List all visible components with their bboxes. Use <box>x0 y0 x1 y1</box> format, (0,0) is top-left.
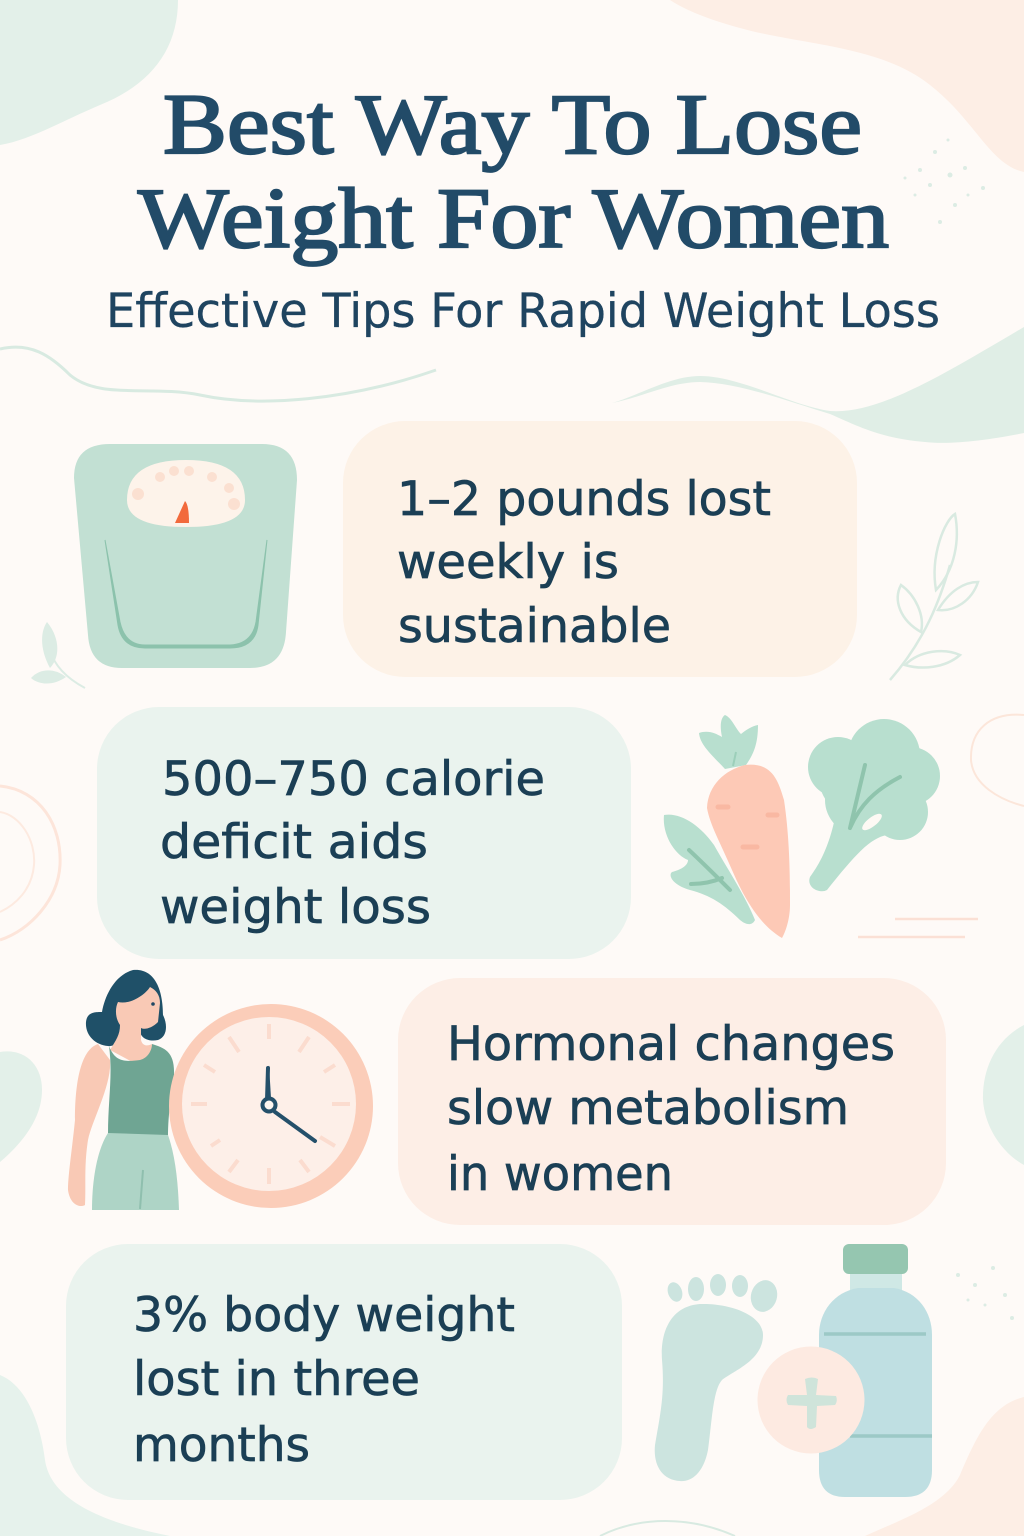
panel: sustainable rate <box>343 421 857 677</box>
title <box>138 76 889 266</box>
panel: sustainable rate: sustainable <box>398 599 671 654</box>
icon: footprint <box>655 1274 781 1481</box>
icon: leaf sprig right <box>890 514 978 680</box>
subtitle: Effective Tips For Rapid Weight Loss <box>106 284 940 339</box>
panel: hormonal changes: Hormonal changes <box>447 1017 895 1072</box>
panel: body weight: 3% body weight <box>133 1288 515 1343</box>
icon: broccoli <box>808 719 940 891</box>
icon: woman with clock <box>68 970 373 1210</box>
icon: leaf sprig left <box>31 622 85 688</box>
title: Best Way To Lose <box>163 76 862 172</box>
title: Weight For Women <box>138 170 889 266</box>
icon: plus badge <box>758 1346 864 1454</box>
panel: body weight <box>66 1244 622 1500</box>
panel: sustainable rate: weekly is <box>397 535 619 590</box>
panel: body weight: lost in three <box>133 1352 420 1407</box>
clock <box>169 1004 373 1208</box>
icon: carrot and leaf <box>664 715 790 938</box>
panel: hormonal changes: in women <box>447 1147 673 1202</box>
panel: hormonal changes <box>398 978 946 1225</box>
icon: water bottle <box>819 1244 932 1497</box>
panel: calorie deficit: deficit aids <box>160 815 428 870</box>
panel: calorie deficit: weight loss <box>160 880 431 935</box>
panel: sustainable rate: 1–2 pounds lost <box>397 472 771 527</box>
panel: calorie deficit <box>97 707 631 959</box>
panel: body weight: months <box>133 1418 310 1473</box>
icon: bathroom scale <box>74 444 297 668</box>
panel: calorie deficit: 500–750 calorie <box>162 752 545 807</box>
panel: hormonal changes: slow metabolism <box>447 1081 849 1136</box>
woman <box>68 970 179 1210</box>
